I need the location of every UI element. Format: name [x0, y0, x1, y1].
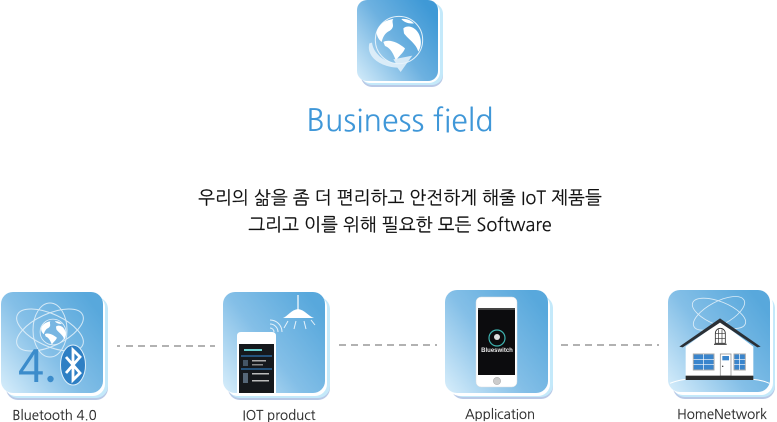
icon: Application phone: [445, 290, 553, 399]
connector 1: [117, 345, 215, 347]
icon: bluetooth 4.0: 4: [18, 339, 44, 392]
subtitle text: 그리고 이를 위해 필요한 모든 Software: [248, 216, 552, 234]
label: Application: Application: [465, 408, 535, 421]
icon: globe with arrow: [357, 0, 443, 87]
subtitle text: [198, 188, 602, 234]
icon: HomeNetwork house: [668, 290, 775, 399]
icon: IOT product: [223, 292, 330, 400]
label: Bluetooth 4.0: Bluetooth 4.0: [12, 409, 97, 422]
subtitle text: 우리의 삶을 좀 더 편리하고 안전하게 해줄 IoT 제품들: [198, 189, 602, 207]
title: Business field: [306, 106, 494, 136]
label: IOT product: IOT product: [242, 409, 315, 422]
connector 3: [561, 344, 659, 346]
icon: Application phone: Blueswitch: [481, 348, 513, 354]
connector 2: [339, 344, 437, 346]
label: HomeNetwork: HomeNetwork: [677, 408, 767, 421]
icon: bluetooth 4.0: [1, 292, 108, 400]
